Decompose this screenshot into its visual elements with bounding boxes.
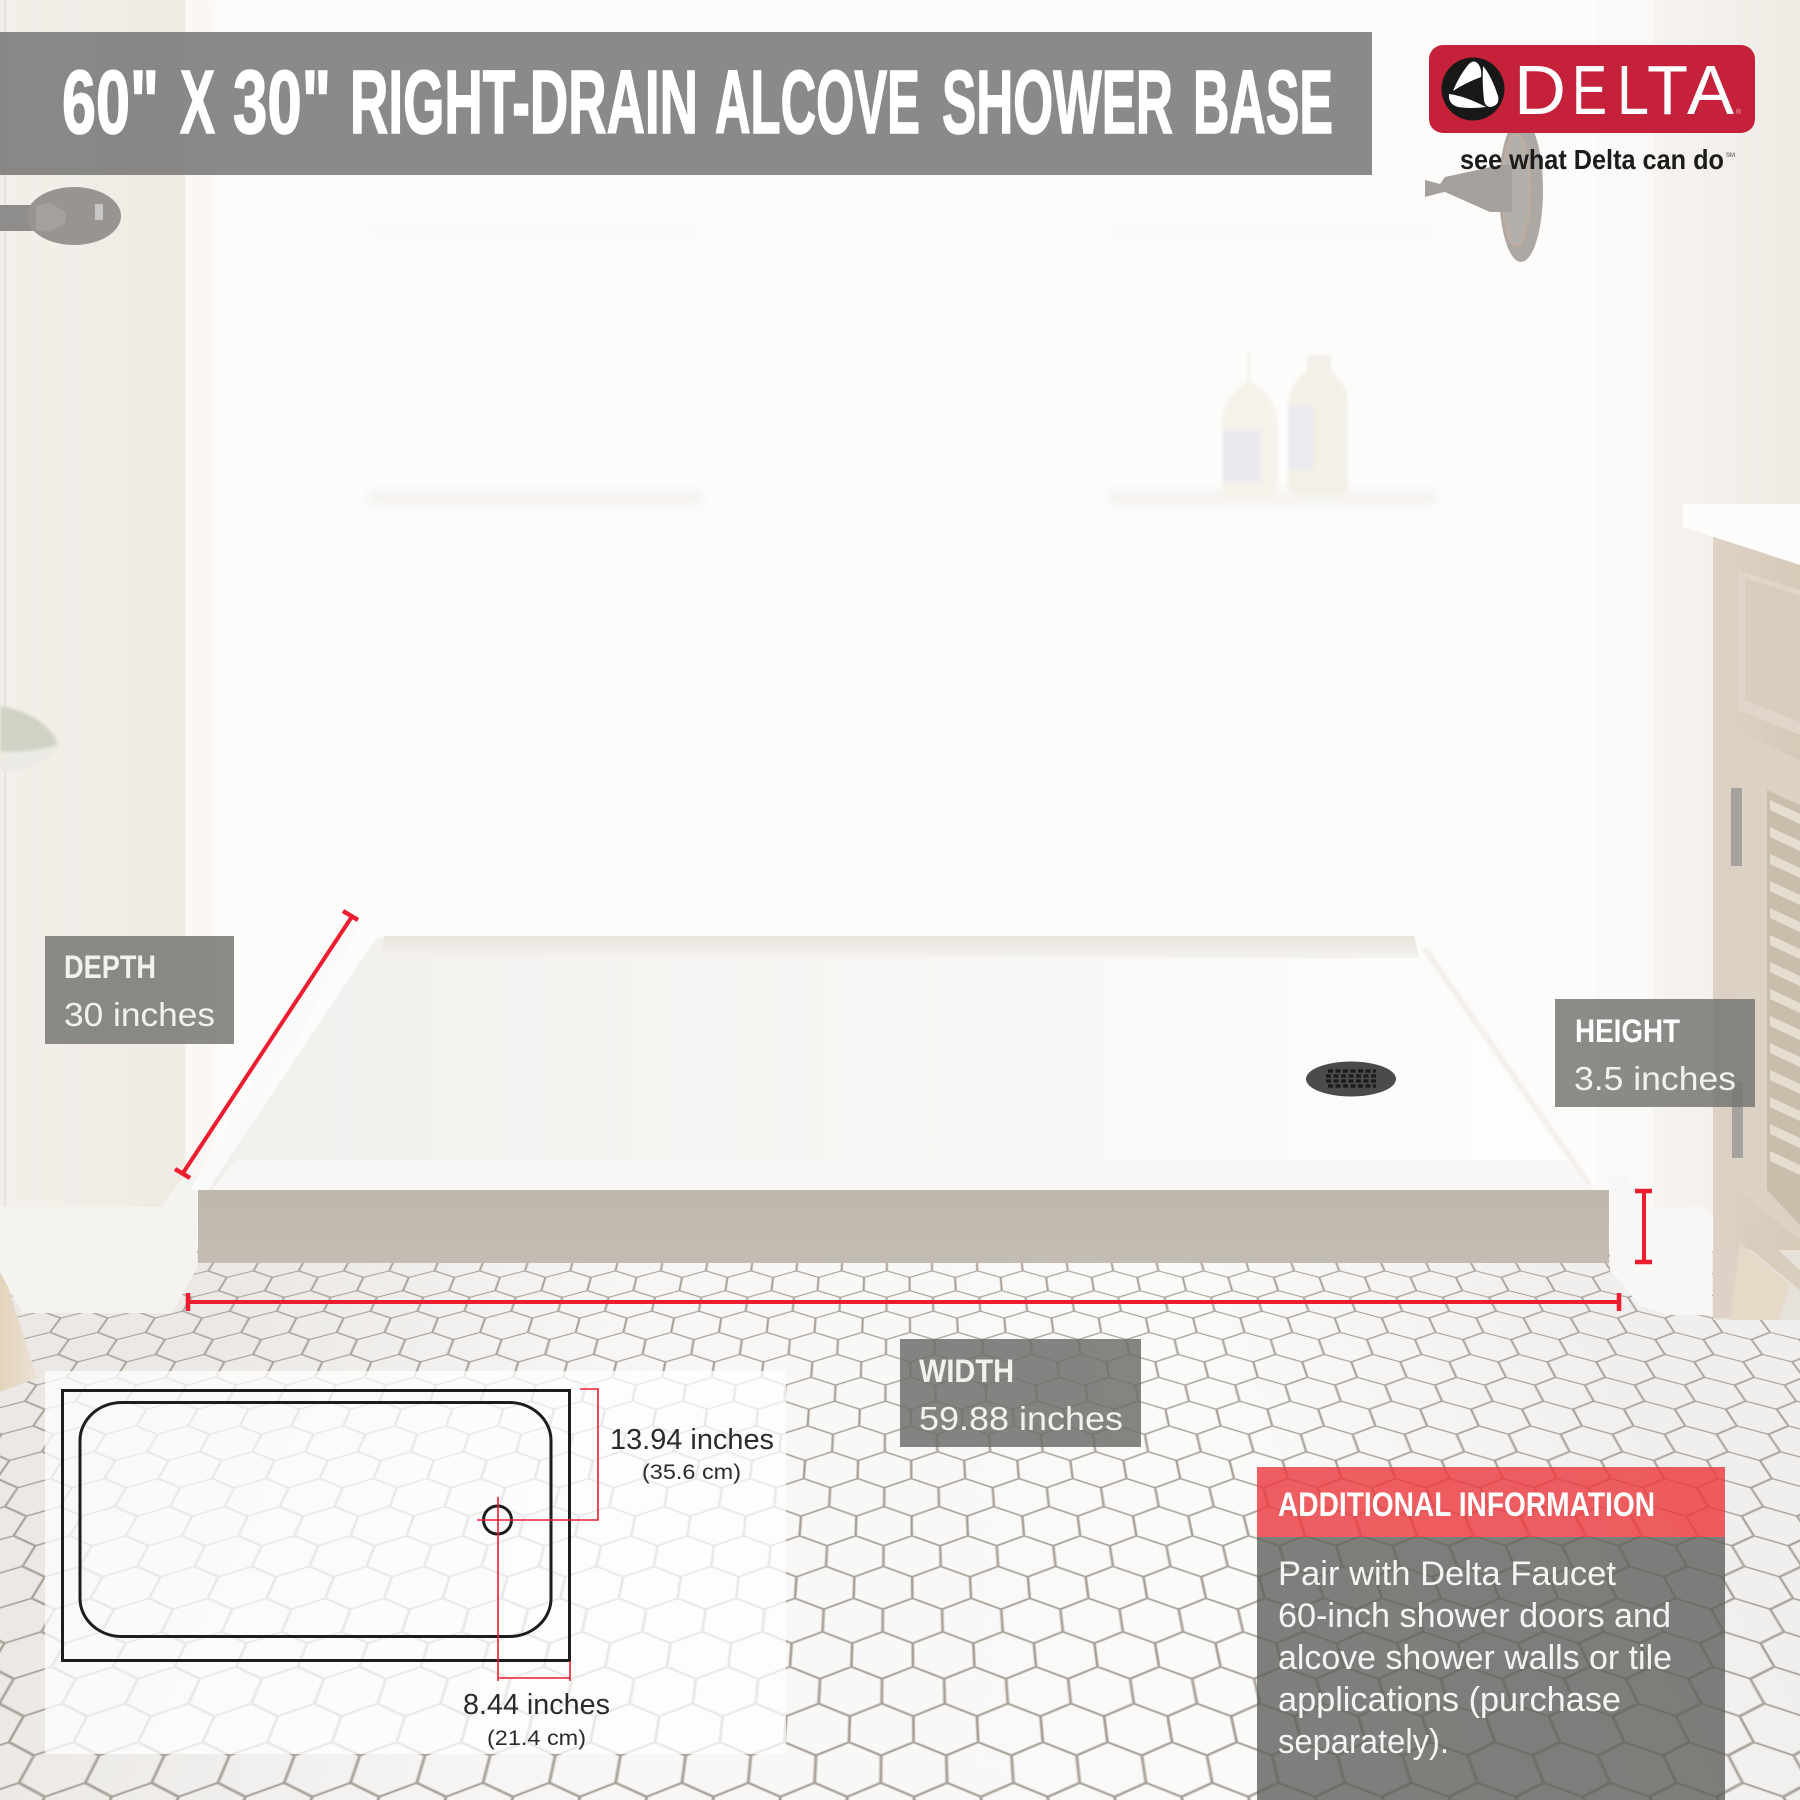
icon: plant leaf xyxy=(0,706,60,772)
cabinet base and foot xyxy=(1713,1220,1800,1320)
DELTA wordmark: E xyxy=(1572,51,1607,129)
DELTA wordmark: D xyxy=(1514,51,1566,129)
back lip xyxy=(378,936,1420,958)
front face xyxy=(198,1190,1609,1263)
Delta logo xyxy=(1429,45,1755,133)
label: height: 3.5 inches xyxy=(1574,1060,1736,1097)
dimension line: height xyxy=(1635,1191,1652,1262)
icon: shower valve right xyxy=(1425,118,1543,262)
drain offset label: 13.94 inches: (35.6 cm) xyxy=(642,1461,741,1484)
base outline xyxy=(62,1390,570,1660)
icon: drain xyxy=(1306,1062,1396,1096)
title text xyxy=(62,53,1333,153)
label: depth: 30 inches xyxy=(64,996,215,1033)
DELTA wordmark: ® xyxy=(1736,108,1742,116)
panel heading: ADDITIONAL INFORMATION xyxy=(1278,1486,1655,1524)
vanity counter xyxy=(1683,504,1800,565)
dimension line: depth xyxy=(175,911,358,1178)
dimension line: width xyxy=(188,1293,1619,1311)
panel body xyxy=(1257,1537,1725,1800)
label: width xyxy=(900,1339,1141,1447)
panel text xyxy=(1278,1555,1672,1761)
panel text: 60-inch shower doors and xyxy=(1278,1597,1671,1635)
drain offset label: 8.44 inches: 8.44 inches xyxy=(463,1689,610,1721)
right baseboard xyxy=(1610,1175,1712,1315)
icon: Delta triangle mark xyxy=(1442,58,1504,120)
label: depth: DEPTH xyxy=(64,949,156,985)
drain offset label: 8.44 inches: (21.4 cm) xyxy=(487,1727,586,1750)
title text: BASE xyxy=(1193,53,1333,153)
icon: shower handle left xyxy=(0,187,121,245)
label: height xyxy=(1555,999,1755,1107)
red dimension lines xyxy=(477,1389,599,1681)
left baseboard xyxy=(0,1175,197,1313)
title text: RIGHT-DRAIN xyxy=(350,53,698,153)
side flange left xyxy=(190,925,360,1190)
logo tagline: see what Delta can do xyxy=(1460,144,1724,175)
label: height: HEIGHT xyxy=(1575,1013,1680,1049)
tray outline xyxy=(80,1402,551,1636)
label: width: WIDTH xyxy=(919,1353,1014,1389)
panel: drain location diagram xyxy=(45,1371,786,1754)
logo tagline: SM xyxy=(1726,153,1735,159)
DELTA wordmark: L xyxy=(1617,51,1649,129)
DELTA wordmark: A xyxy=(1687,51,1734,129)
title text: 60" xyxy=(62,53,159,153)
label: width: 59.88 inches xyxy=(919,1400,1123,1437)
DELTA wordmark: T xyxy=(1647,51,1688,129)
drain offset label: 13.94 inches: 13.94 inches xyxy=(610,1424,774,1456)
tray slope shadow xyxy=(1424,948,1590,1186)
drain offset label: 13.94 inches xyxy=(610,1424,774,1484)
drain circle xyxy=(484,1506,512,1534)
title text: SHOWER xyxy=(942,53,1173,153)
shower base xyxy=(190,925,1609,1263)
vanity cabinet xyxy=(1683,504,1800,1260)
title text: X xyxy=(180,53,215,153)
title banner xyxy=(0,32,1372,175)
drain offset label: 8.44 inches xyxy=(463,1689,610,1750)
panel text: alcove shower walls or tile xyxy=(1278,1639,1672,1677)
title text: 30" xyxy=(233,53,331,153)
icon: shampoo bottles on shelf xyxy=(1222,350,1348,497)
tray surface xyxy=(208,936,1593,1190)
panel header xyxy=(1257,1467,1725,1537)
panel text: applications (purchase xyxy=(1278,1681,1621,1719)
panel text: separately). xyxy=(1278,1723,1449,1761)
DELTA wordmark xyxy=(1514,51,1742,129)
front lip xyxy=(212,1160,1593,1190)
panel text: Pair with Delta Faucet xyxy=(1278,1555,1617,1593)
floor: hexagonal tile xyxy=(0,1250,1800,1800)
label: depth xyxy=(45,936,234,1044)
left floor leg xyxy=(0,1262,37,1392)
title text: ALCOVE xyxy=(715,53,920,153)
panel: additional information xyxy=(1257,1467,1725,1800)
